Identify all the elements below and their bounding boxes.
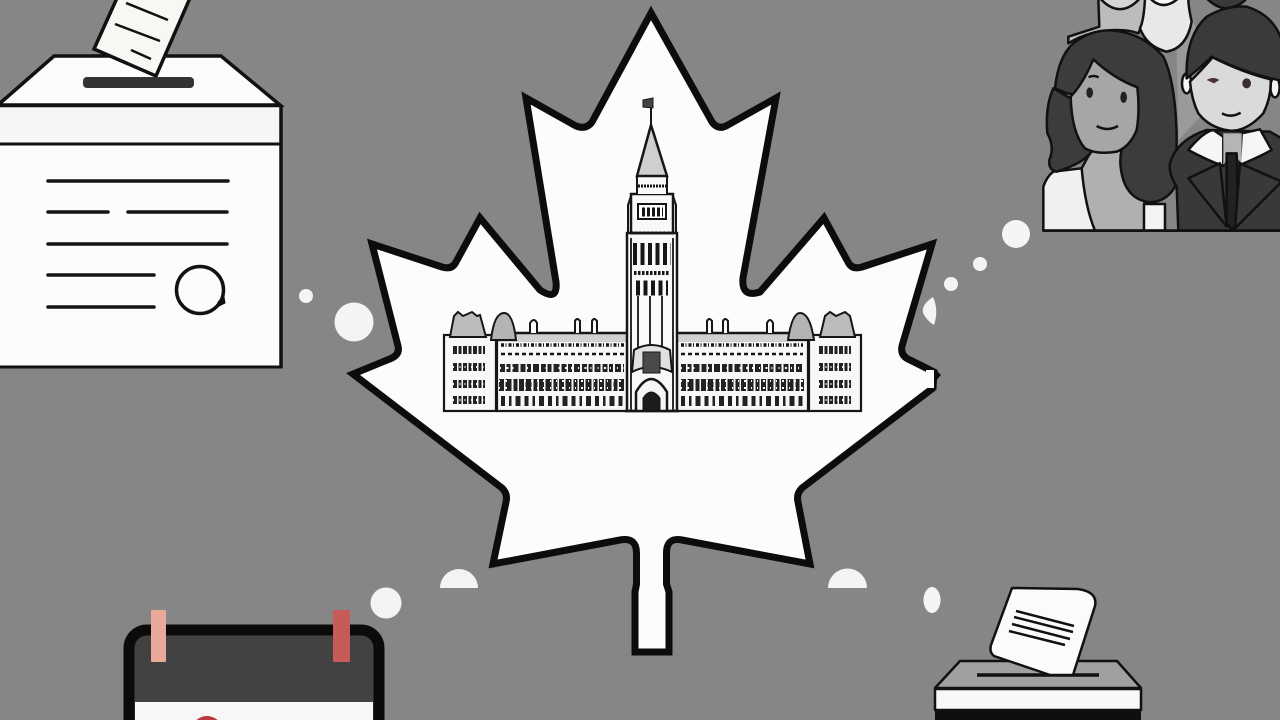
box slot: [977, 673, 1099, 677]
roofline and wings: [497, 319, 808, 411]
icon: group of people top right: [1043, 0, 1280, 231]
form lines on box: [48, 181, 228, 307]
calendar page: [135, 702, 373, 720]
woman: [1043, 30, 1177, 231]
circular stamp: [176, 266, 225, 314]
icon: calendar bottom left: [129, 610, 379, 720]
parliament building: [444, 98, 861, 411]
frame base line: [1043, 227, 1280, 235]
right binding tab: [333, 610, 350, 662]
left binding tab: [151, 610, 166, 662]
box front: [935, 711, 1141, 720]
ballot slot: [83, 77, 194, 88]
calendar body: [129, 630, 379, 720]
connector dots: [299, 220, 1030, 618]
central peace tower: [625, 98, 679, 411]
ballot paper: [990, 588, 1095, 675]
box band: [935, 689, 1141, 710]
box lid: [0, 56, 280, 105]
man: [1170, 6, 1280, 231]
wing window rows: [499, 345, 804, 401]
box lid: [935, 661, 1141, 688]
icon: large ballot box top left: [0, 0, 281, 368]
background people: [1068, 0, 1247, 140]
ballot paper entering box: [94, 0, 190, 76]
box front: [0, 144, 281, 367]
left pavilion: [444, 312, 516, 411]
leaf tip fragment: [934, 368, 941, 383]
box band: [0, 106, 281, 144]
leaf: central maple leaf: [353, 13, 941, 652]
red date marker: [191, 716, 223, 720]
icon: small ballot box bottom right: [935, 588, 1141, 720]
leaf tip cutout at right edge: [926, 370, 934, 388]
right pavilion: [788, 312, 861, 411]
